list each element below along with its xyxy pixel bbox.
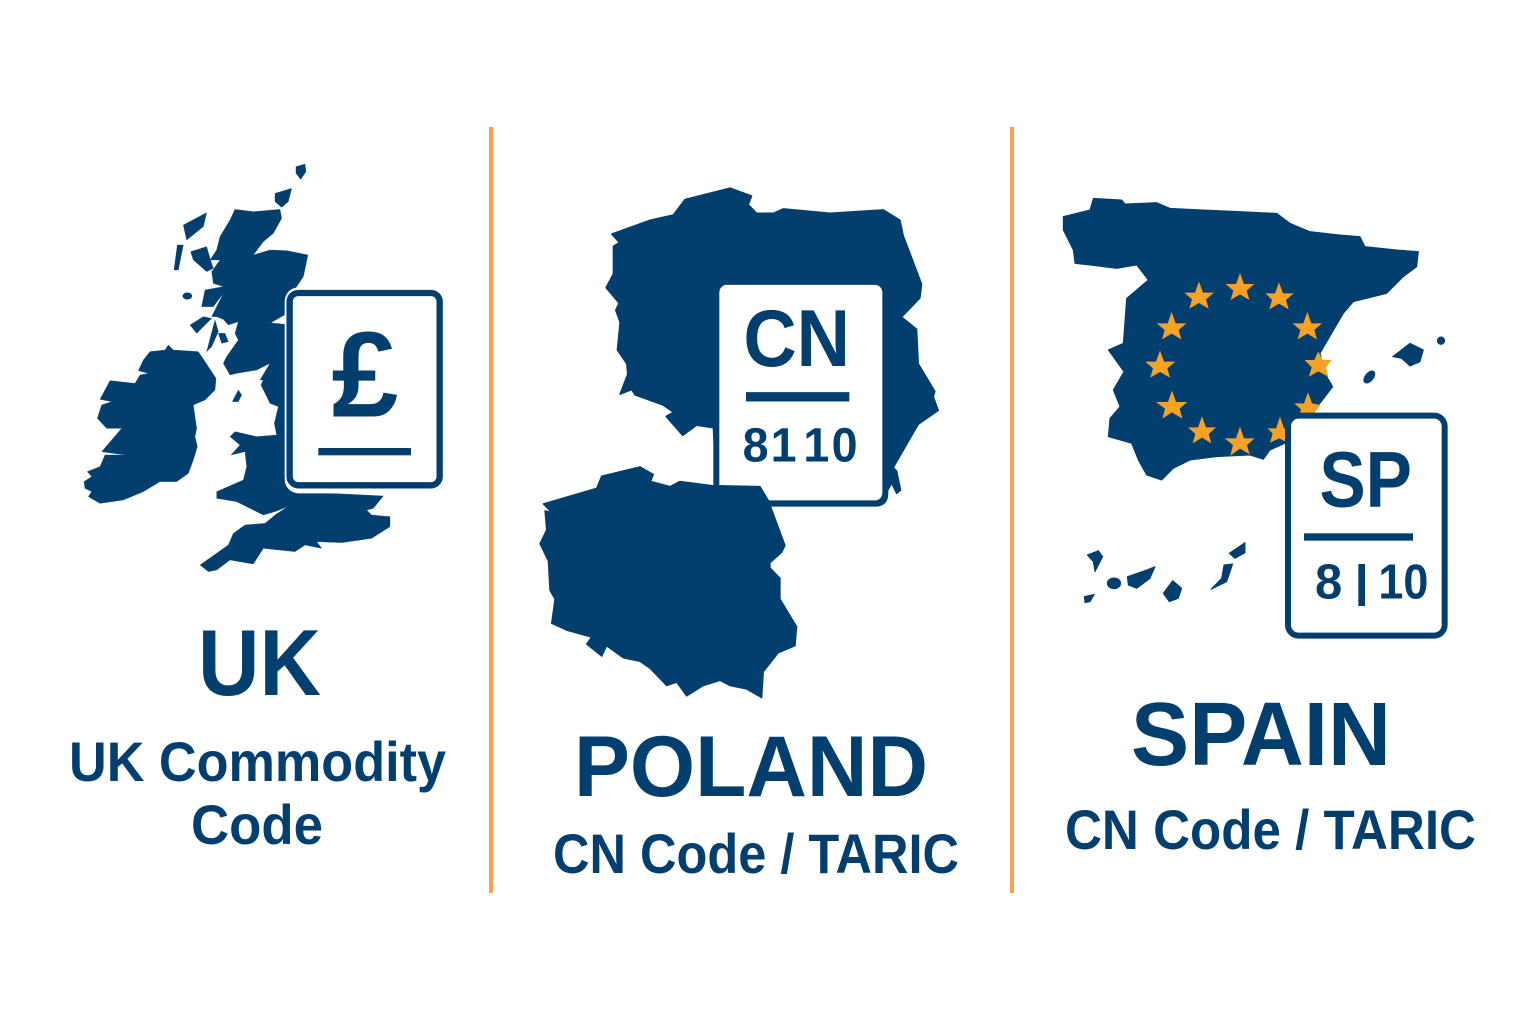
label: UK Commodity Code: Code xyxy=(191,793,323,856)
label: CN Code / TARIC: CN Code / TARIC xyxy=(553,822,959,885)
card: pound sign: £ xyxy=(332,307,398,443)
card: SP 8 | 10 xyxy=(1288,416,1445,636)
map: Poland large xyxy=(606,188,938,499)
card: pound sign xyxy=(285,287,445,493)
card: SP 8 | 10: 10 xyxy=(1378,555,1428,609)
heading: POLAND: POLAND xyxy=(574,719,928,815)
card: SP 8 | 10: 8 xyxy=(1315,555,1342,609)
map: British Isles xyxy=(84,164,390,572)
card: CN 8110: 8110 xyxy=(743,419,858,473)
panel: UK xyxy=(69,164,446,856)
icon: EU stars xyxy=(1145,273,1332,456)
map: Spain xyxy=(1063,198,1445,603)
label: UK Commodity Code: UK Commodity xyxy=(69,730,446,793)
label: CN Code / TARIC: CN Code / TARIC xyxy=(1065,798,1476,861)
panel: Poland xyxy=(540,188,959,885)
heading: SPAIN: SPAIN xyxy=(1131,685,1391,785)
label: UK Commodity Code xyxy=(69,730,446,856)
heading: UK: UK xyxy=(198,610,321,715)
card: SP 8 | 10: SP xyxy=(1319,436,1412,524)
panel: Spain xyxy=(1063,198,1476,861)
card: CN 8110: CN xyxy=(743,294,850,383)
map: Poland small xyxy=(540,467,797,698)
card: CN 8110 xyxy=(713,281,888,507)
